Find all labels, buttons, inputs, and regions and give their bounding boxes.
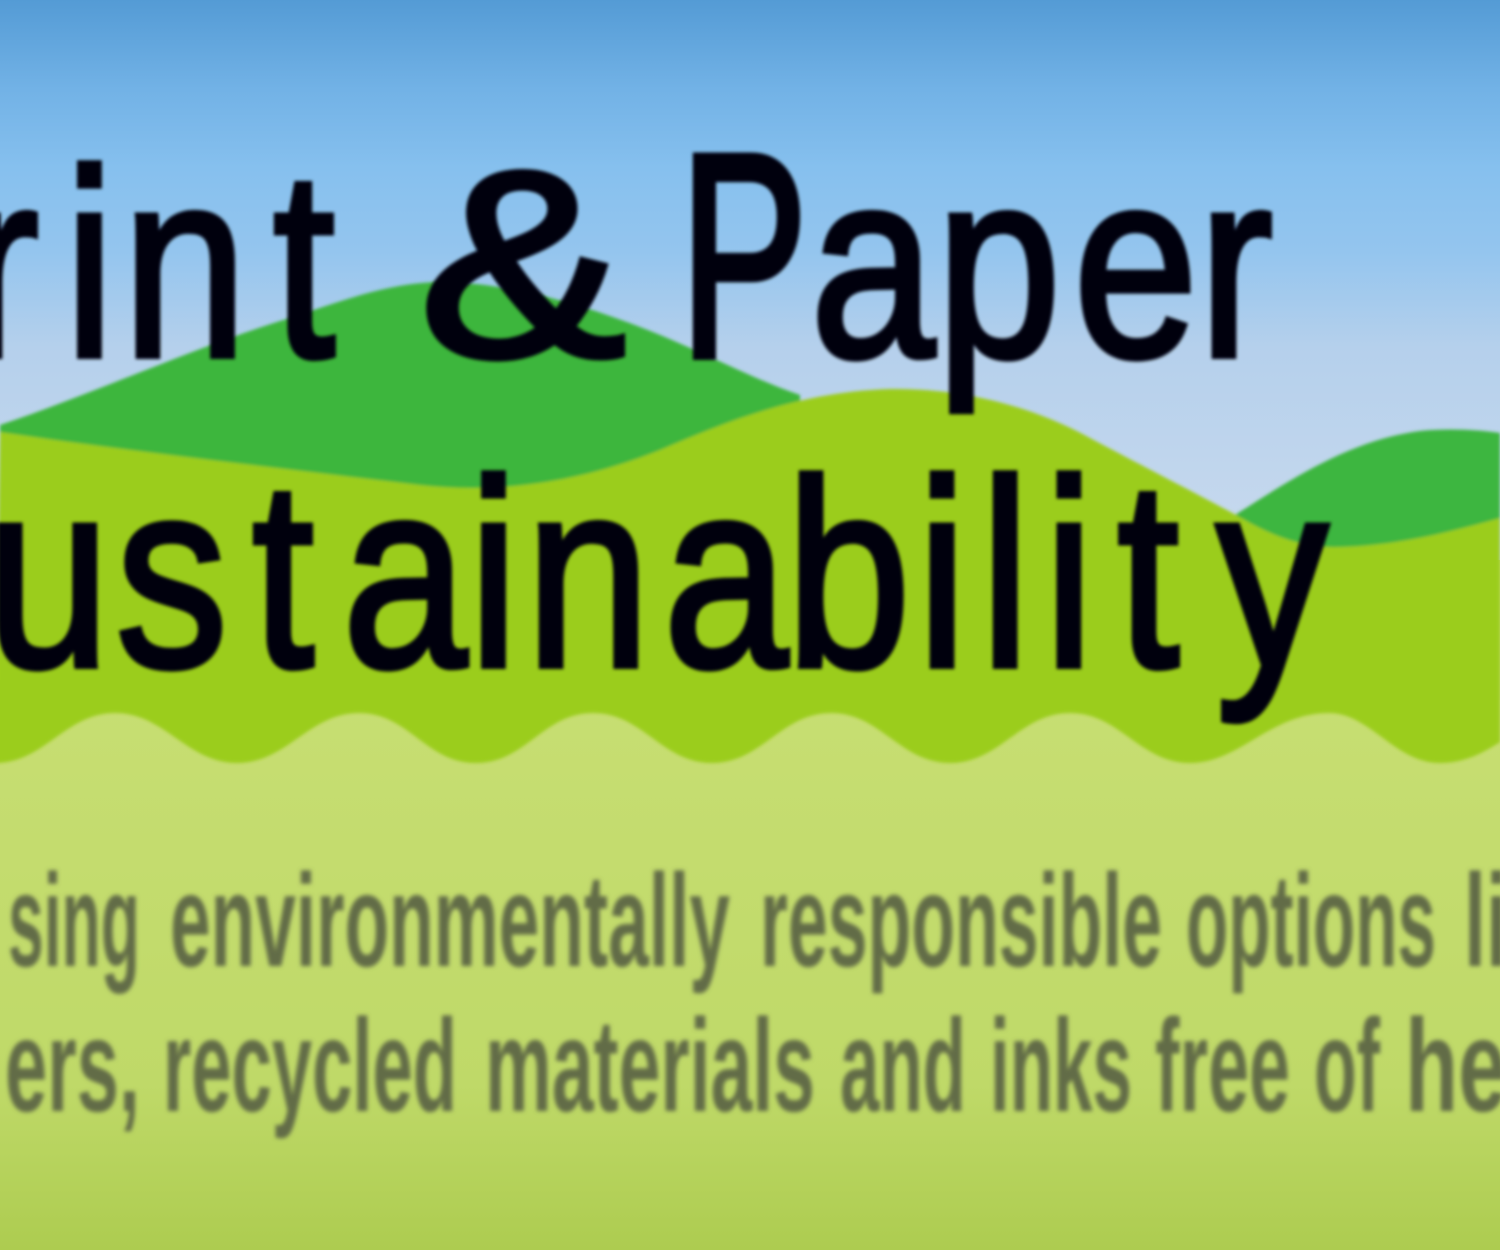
body text line 1 <box>8 847 1500 994</box>
body text line 2: of <box>1314 992 1381 1139</box>
hill: front lime green with scalloped edge <box>0 389 1500 763</box>
body text: description <box>5 847 1500 1139</box>
body text line 2 <box>5 992 1500 1139</box>
background: ground <box>0 700 1500 1250</box>
title word: Paper initial: P <box>680 95 807 419</box>
body text line 2: inks <box>990 992 1132 1139</box>
body text line 1: sing <box>8 847 140 994</box>
hill: back left dark green <box>0 282 800 500</box>
body text line 2: materials <box>485 992 815 1139</box>
body text line 2: free <box>1155 992 1290 1139</box>
title: Print & Paper Sustainability <box>0 95 1328 723</box>
title word: ampersand: & <box>419 116 626 413</box>
body text line 1: responsible <box>760 847 1162 994</box>
illustration: rolling green hills <box>0 282 1500 763</box>
body text line 1: environmentally <box>170 847 730 994</box>
body text line 2: recycled <box>163 992 457 1139</box>
body text line 2: and <box>840 992 966 1139</box>
hill: back right dark green <box>1235 430 1500 570</box>
title word: aper: aper <box>811 117 1273 413</box>
background: sky <box>0 0 1500 560</box>
body text line 2: ers, <box>5 992 140 1139</box>
